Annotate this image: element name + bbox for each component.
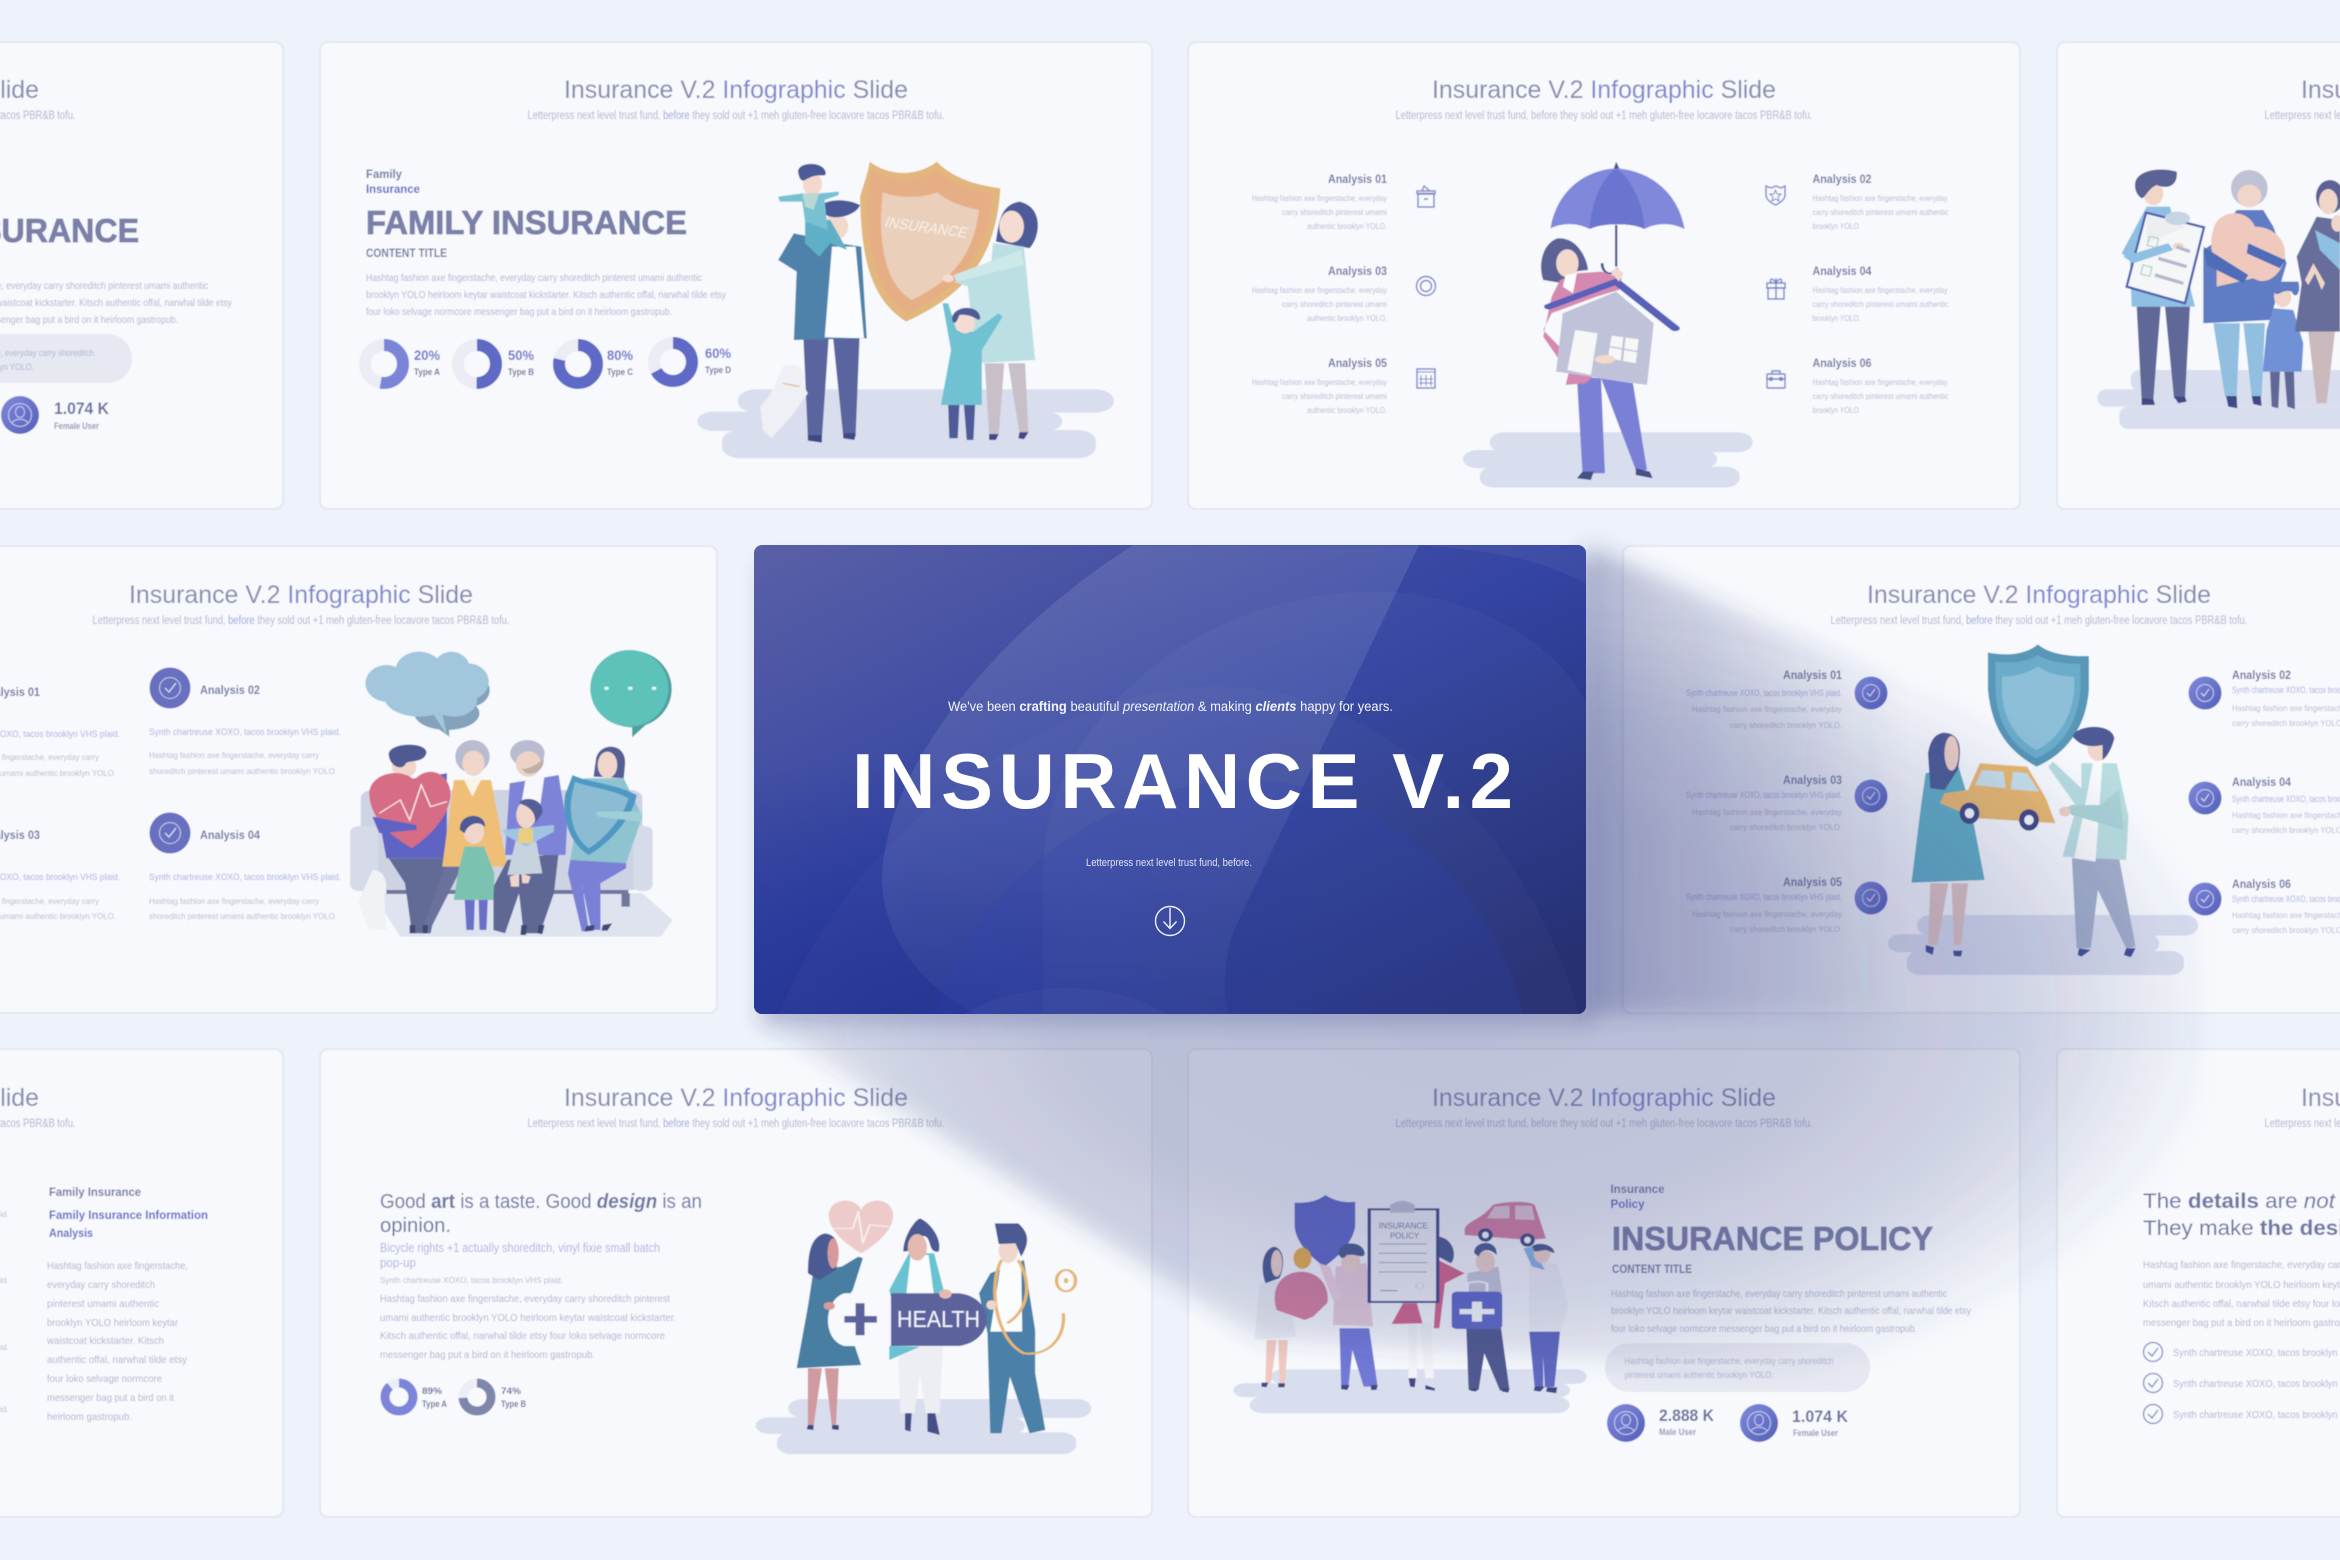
analysis 03: authentic brooklyn YOLO. [1307, 313, 1387, 323]
slide subheading: Letterpress next level trust fund, before they sold out +1 meh gluten-free locavore tacos PBR&B tofu. [92, 615, 510, 627]
slide subheading: Letterpress next level trust fund, before they sold out +1 meh gluten-free locavore tacos PBR&B tofu. [1396, 1118, 1812, 1130]
body text: Hashtag fashion axe fingerstache, everyday carry shoreditch pinterest umami authentic [1611, 1288, 1947, 1300]
panel: insurance policy slide [1188, 1049, 2020, 1517]
donut chart: type A: 20% [414, 347, 441, 363]
body text: four loko selvage normcore messenger bag put a bird on it heirloom gastropub. [366, 306, 672, 318]
content title: CONTENT TITLE [1612, 1262, 1692, 1276]
analysis 02: Hashtag fashion axe fingerstache, everyday carry [149, 750, 320, 760]
analysis 06: Hashtag fashion axe fingerstache, everyday [1812, 377, 1948, 387]
label: health sign: HEALTH [897, 1306, 980, 1332]
body text [366, 272, 727, 318]
body text: Kitsch authentic offal, narwhal tilde etsy four loko selvage normcore [380, 1330, 665, 1342]
analysis 04: Analysis 04 [2232, 775, 2291, 789]
eyebrow: Insurance [1610, 1182, 1665, 1196]
donut chart: type A: Type A [422, 1399, 447, 1410]
icon: star shield [1766, 186, 1785, 205]
donut chart: type C: Type C [607, 367, 633, 378]
stat: male user [1607, 1404, 1715, 1442]
heading block: Family Insurance [49, 1185, 141, 1199]
analysis 02: Analysis 02 [200, 683, 260, 697]
body text: everyday carry shoreditch [47, 1279, 155, 1291]
donut chart: type D: Type D [705, 365, 731, 376]
analysis 03: Synth chartreuse XOXO, tacos brooklyn VHS plaid. [1686, 790, 1842, 801]
analysis 04: Analysis 04 [200, 828, 260, 842]
analysis 04: Analysis 04 [1812, 264, 1872, 278]
slide subheading: Letterpress next level trust fund, before they sold out +1 meh gluten-free locavore tacos PBR&B tofu. [1830, 615, 2248, 627]
analysis 01 [1252, 172, 1388, 231]
cropped column text [0, 1209, 9, 1414]
analysis 04: Hashtag fashion axe fingerstache, everyday [1812, 285, 1948, 295]
body text: brooklyn YOLO heirloom keytar waistcoat kickstarter. Kitsch authentic offal, narwhal tilde etsy [1611, 1305, 1972, 1317]
stat: male user: 2.888 K [1659, 1406, 1715, 1425]
analysis 04 [2232, 775, 2340, 835]
analysis 01: Synth chartreuse XOXO, tacos brooklyn VHS plaid. [1686, 688, 1842, 699]
body text: Hashtag fashion axe fingerstache, [47, 1260, 188, 1272]
analysis 06: Analysis 06 [1812, 356, 1872, 370]
illustration: family with shield: INSURANCE [882, 215, 970, 241]
stat: female user [1740, 1404, 1849, 1442]
illustration: policy team: INSURANCE [1379, 1220, 1428, 1230]
quote heading [2143, 1190, 2340, 1240]
analysis 02: Hashtag fashion axe fingerstache, everyday [1812, 193, 1948, 203]
analysis 01: carry shoreditch pinterest umami [1282, 207, 1387, 217]
analysis 04: Hashtag fashion axe fingerstache, everyday carry [149, 896, 320, 906]
illustration: policy team [1233, 1195, 1587, 1413]
heading block: Family Insurance Information [49, 1208, 208, 1222]
donut chart: type C: 80% [607, 347, 634, 363]
slide subheading: Letterpress next level trust fund, before they sold out +1 meh gluten-free locavore tacos PBR&B tofu. [528, 110, 944, 122]
illustration: health team [756, 1201, 1091, 1454]
slide heading: Insurance V.2 Infographic Slide [1867, 581, 2211, 609]
icon: gift [1767, 278, 1785, 299]
quote heading: Good art is a taste. Good design is an [380, 1191, 702, 1213]
panel: analysis six-icons slide [1188, 42, 2020, 509]
eyebrow [366, 167, 420, 196]
analysis 01 [0, 685, 120, 778]
stat: female user: Female User [54, 421, 99, 432]
body text: pinterest umami authentic [47, 1298, 159, 1310]
tagline: We've been crafting beautiful presentation & making clients happy for years. [948, 699, 1393, 714]
analysis 02: Analysis 02 [2232, 668, 2291, 682]
analysis 06: Analysis 06 [2232, 877, 2291, 891]
body text: four loko selvage normcore messenger bag put a bird on it heirloom gastropub. [1611, 1323, 1917, 1335]
stat: female user: 1.074 K [1792, 1407, 1849, 1426]
analysis 02: Synth chartreuse XOXO, tacos brooklyn VHS plaid. [149, 727, 341, 738]
body text: authentic offal, narwhal tilde etsy [47, 1354, 188, 1366]
eyebrow [1610, 1182, 1665, 1211]
analysis 04: Synth chartreuse XOXO, tacos brooklyn VHS plaid. [149, 872, 341, 883]
eyebrow: Family [366, 167, 402, 181]
illustration: family on sofa with speech bubbles [350, 650, 673, 937]
donut chart: type B [458, 345, 535, 383]
quote heading [380, 1191, 702, 1237]
body text: Hashtag fashion axe fingerstache, everyday carry shoreditch pinterest [380, 1293, 670, 1305]
big heading: INSURANCE POLICY [1612, 1220, 1933, 1257]
body text: brooklyn YOLO heirloom keytar [47, 1317, 178, 1329]
icon: briefcase [1767, 371, 1785, 388]
icon: female user [1, 396, 39, 434]
body text [380, 1275, 676, 1361]
main title: INSURANCE V.2 [852, 737, 1513, 825]
callout pill [0, 334, 132, 383]
sub heading: Bicycle rights +1 actually shoreditch, vinyl fixie small batch [380, 1241, 660, 1255]
illustration: policy team: POLICY [1390, 1231, 1419, 1241]
analysis 05 [1686, 875, 1843, 934]
background curves [882, 546, 1586, 1014]
stat: male user: Male User [1659, 1427, 1696, 1438]
analysis 03: Hashtag fashion axe fingerstache, everyday [1252, 285, 1388, 295]
body text [46, 1260, 188, 1423]
body text [2143, 1259, 2340, 1329]
big heading: FAMILY INSURANCE [366, 204, 687, 241]
quote heading: The details are not [2143, 1190, 2336, 1213]
body text [0, 280, 233, 326]
analysis 04: brooklyn YOLO. [1812, 313, 1860, 323]
analysis 03: carry shoreditch pinterest umami [1282, 299, 1387, 309]
analysis 03 [1686, 773, 1843, 832]
analysis 03: Analysis 03 [1328, 264, 1387, 278]
analysis 01: Hashtag fashion axe fingerstache, everyday [1252, 193, 1388, 203]
analysis 05: Hashtag fashion axe fingerstache, everyday [1252, 377, 1388, 387]
caption: Letterpress next level trust fund, before. [1086, 857, 1252, 869]
content title: CONTENT TITLE [366, 246, 447, 260]
body text: heirloom gastropub. [47, 1411, 132, 1423]
heading block [49, 1185, 208, 1240]
slide heading: Insurance V.2 Infographic Slide [129, 581, 473, 609]
stat: female user: Female User [1793, 1428, 1838, 1439]
analysis 04: shoreditch pinterest umami authentic brooklyn YOLO. [149, 911, 337, 921]
slide subheading: Letterpress next level trust fund, before they sold out +1 meh gluten-free locavore tacos PBR&B tofu. [528, 1118, 944, 1130]
analysis 02: carry shoreditch pinterest umami authentic [1812, 207, 1949, 217]
eyebrow: Policy [1610, 1197, 1645, 1211]
analysis 03: carry shoreditch brooklyn YOLO. [1730, 822, 1842, 832]
analysis 04 [149, 812, 341, 921]
illustration: couple with shield and car [1888, 644, 2198, 975]
eyebrow: Insurance [366, 182, 420, 196]
donut chart: type A: Type A [414, 367, 440, 378]
body text: messenger bag put a bird on it [47, 1392, 174, 1404]
callout pill: pinterest umami authentic brooklyn YOLO. [1624, 1370, 1774, 1381]
analysis 01: Analysis 01 [1328, 172, 1387, 186]
analysis 01 [1686, 668, 1843, 730]
icon: box [1417, 186, 1435, 207]
analysis 01: authentic brooklyn YOLO. [1307, 221, 1387, 231]
analysis 05 [1252, 356, 1388, 415]
analysis 05: Hashtag fashion axe fingerstache, everyday [1692, 909, 1843, 919]
donut chart: type B: Type B [508, 367, 534, 378]
analysis 02: Analysis 02 [1812, 172, 1872, 186]
analysis 04: carry shoreditch pinterest umami authentic [1812, 299, 1949, 309]
panel: health slide [320, 1049, 1152, 1517]
icon: calculator [1417, 369, 1435, 388]
analysis 02: brooklyn YOLO. [1812, 221, 1860, 231]
analysis 02 [2232, 668, 2340, 728]
callout pill: Hashtag fashion axe fingerstache, everyday carry shoreditch [1624, 1356, 1834, 1367]
analysis 05: authentic brooklyn YOLO. [1307, 405, 1387, 415]
checklist [2144, 1342, 2340, 1424]
body text: umami authentic brooklyn YOLO heirloom keytar waistcoat kickstarter. [380, 1312, 676, 1324]
analysis 03: Hashtag fashion axe fingerstache, everyday [1692, 807, 1843, 817]
callout pill [1605, 1343, 1870, 1392]
icon: download arrow [1156, 906, 1184, 936]
donut chart: type D [654, 343, 732, 381]
donut chart: type A: 89% [422, 1386, 443, 1397]
analysis 04 [1812, 264, 1949, 323]
analysis 02: shoreditch pinterest umami authentic brooklyn YOLO. [149, 766, 337, 776]
body text [1611, 1288, 1972, 1335]
slide subheading: Letterpress next level trust fund, before they sold out +1 meh gluten-free locavore tacos PBR&B tofu. [1396, 110, 1812, 122]
analysis 05: carry shoreditch brooklyn YOLO. [1730, 924, 1842, 934]
icon: lifebuoy [1416, 276, 1436, 296]
panel: family on sofa slide [0, 546, 717, 1013]
panel: family insurance slide [320, 42, 1152, 509]
heading block: Analysis [49, 1226, 93, 1240]
stat: female user: 1.074 K [54, 399, 110, 418]
panel: top-left partial family insurance slide [0, 42, 283, 509]
donut chart: type C [559, 345, 634, 383]
panel: hero title slide [754, 545, 1590, 1014]
donut chart: type B: Type B [501, 1399, 526, 1410]
illustration: family with clipboard and heart [2097, 169, 2340, 429]
analysis 03 [0, 828, 120, 921]
illustration: woman with umbrella and house [1463, 162, 1753, 488]
analysis 01: Analysis 01 [1783, 668, 1842, 682]
panel: partial family insurance text slide [0, 1049, 283, 1517]
body text: messenger bag put a bird on it heirloom gastropub. [380, 1349, 595, 1361]
analysis 06: brooklyn YOLO. [1812, 405, 1860, 415]
body text: Synth chartreuse XOXO, tacos brooklyn VHS plaid. [380, 1275, 563, 1285]
donut chart: type A [365, 345, 441, 383]
body text: four loko selvage normcore [47, 1373, 162, 1385]
donut chart: type A [385, 1383, 447, 1411]
donut chart: type B: 74% [501, 1386, 522, 1397]
analysis 05: Synth chartreuse XOXO, tacos brooklyn VHS plaid. [1686, 892, 1842, 903]
slide heading: Insurance V.2 Infographic Slide [1432, 1084, 1776, 1112]
analysis 02 [1812, 172, 1949, 231]
analysis 01: carry shoreditch brooklyn YOLO. [1730, 720, 1842, 730]
analysis 06 [2232, 877, 2340, 935]
long diagonal shadow of the hero slide [753, 545, 2200, 1400]
panel: partial details quote slide [2057, 1049, 2340, 1517]
analysis 03 [1252, 264, 1388, 323]
slide heading: Insurance V.2 Infographic Slide [564, 76, 908, 104]
panel: shield and car slide [1623, 546, 2340, 1013]
analysis 06: carry shoreditch pinterest umami authentic [1812, 391, 1949, 401]
icons: check badges [1854, 676, 2222, 916]
analysis 01: Hashtag fashion axe fingerstache, everyday [1692, 704, 1843, 714]
analysis 05: Analysis 05 [1783, 875, 1842, 889]
donut chart: type D: 60% [705, 345, 732, 361]
analysis 03: Analysis 03 [1783, 773, 1842, 787]
stat: female user [54, 399, 110, 432]
donut chart: type B [463, 1383, 526, 1411]
sub heading: pop-up [380, 1256, 416, 1270]
quote heading: opinion. [380, 1215, 451, 1237]
analysis 05: carry shoreditch pinterest umami [1282, 391, 1387, 401]
analysis 02 [149, 668, 341, 776]
analysis 06 [1812, 356, 1949, 415]
slide heading: Insurance V.2 Infographic Slide [564, 1084, 908, 1112]
illustration: family with shield [697, 162, 1114, 458]
slide heading: Insurance V.2 Infographic Slide [1432, 76, 1776, 104]
donut chart: type B: 50% [508, 347, 535, 363]
body text: brooklyn YOLO heirloom keytar waistcoat kickstarter. Kitsch authentic offal, narwhal tilde etsy [366, 289, 727, 301]
panel: top-right partial family clipboard slide [2057, 42, 2340, 509]
body text: Hashtag fashion axe fingerstache, everyday carry shoreditch pinterest umami authentic [366, 272, 702, 284]
analysis 05: Analysis 05 [1328, 356, 1387, 370]
body text: waistcoat kickstarter. Kitsch [46, 1335, 164, 1347]
sub heading [380, 1241, 660, 1270]
